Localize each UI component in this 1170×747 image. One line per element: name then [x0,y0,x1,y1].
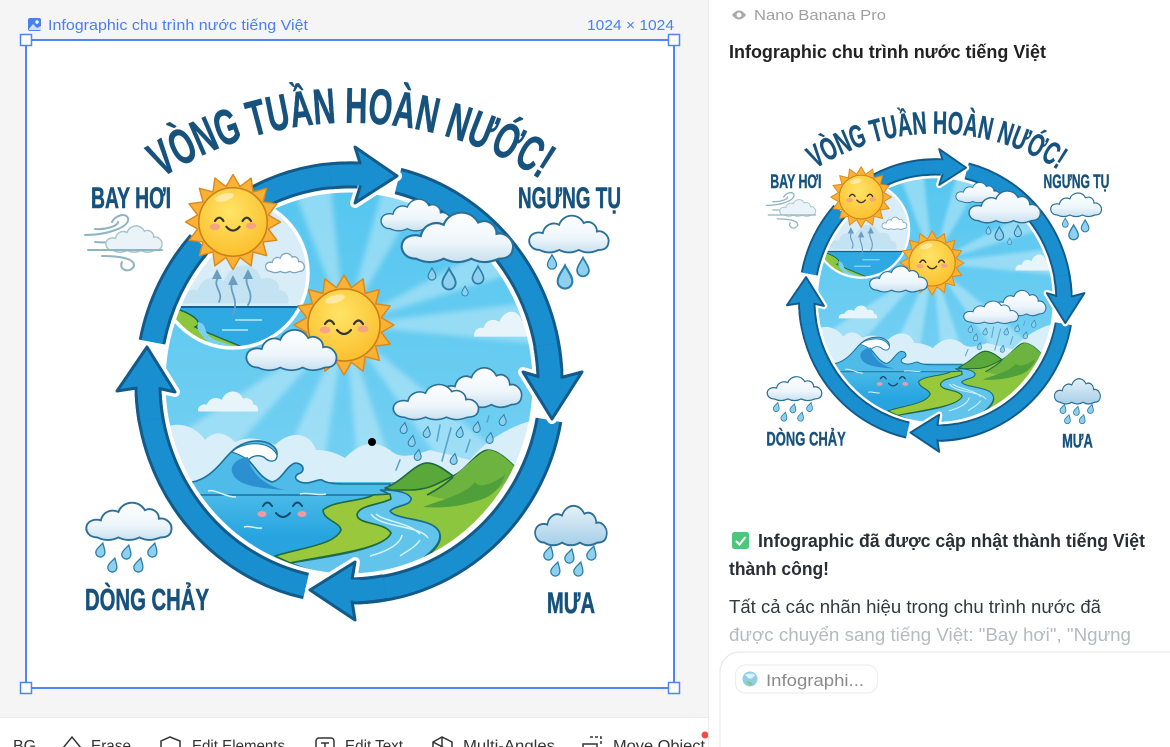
success message: Infographic đã được cập nhật thành tiếng Việt [758,531,1145,551]
model name: Nano Banana Pro [754,8,886,24]
attachment chip: Infographi... [766,671,864,690]
wave [192,441,390,528]
plain white clouds [198,312,538,412]
icon: condensation cloud [529,216,609,289]
main infographic text [85,82,621,620]
icon: evaporation sun [186,174,280,270]
thumbnail infographic [766,107,1109,453]
panel: bottom toolbar [0,717,709,747]
arrowheads [117,147,582,620]
thumbnail infographic: DÒNG CHẢY [766,426,846,450]
label: mưa: MƯA [547,587,595,620]
sea [160,482,540,592]
condensation clouds in scene [381,199,522,420]
attachment chip [736,665,878,693]
label: bay hơi: BAY HƠI [91,182,171,215]
river [290,490,440,585]
thumbnail infographic: VÒNG TUẦN HOÀN NƯỚC! [804,107,1068,169]
hills and land [385,450,535,562]
label: dòng chảy: DÒNG CHẢY [85,581,209,617]
white ring edge [163,190,535,576]
description text: Tất cả các nhãn hiệu trong chu trình nước đã [729,597,1102,617]
condensation drops [428,266,484,296]
description text: được chuyển sang tiếng Việt: "Bay hơi", "Ngưng [729,625,1131,645]
title: VÒNG TUẦN HOÀN NƯỚC! [144,82,556,178]
result title: Infographic chu trình nước tiếng Việt [729,42,1046,62]
thumbnail infographic: MƯA [1062,431,1093,452]
water cycle artwork [85,147,609,620]
sea face [258,502,306,517]
description text [729,597,1131,645]
input box [720,652,1170,747]
left river bank [275,494,391,563]
thumbnail infographic: NGƯNG TỤ [1044,172,1109,193]
icon: rain cloud [535,506,607,577]
rays sun [294,275,394,375]
horizon clouds [160,420,540,500]
icon: wind and cloud [85,215,162,270]
success message [729,531,1145,579]
cycle ring [148,175,550,591]
selected image frame [20,34,680,694]
image filename label: Infographic chu trình nước tiếng Việt [48,17,309,34]
evaporation arrows [216,276,251,315]
panel: chat sidebar [708,0,1170,747]
inset evaporation bubble [158,198,310,352]
cursor dot [368,438,376,446]
label: ngưng tụ: NGƯNG TỤ [518,182,621,215]
rain shower [396,416,489,470]
scene circle [150,180,550,592]
cloud near sun [246,330,336,370]
icon: green check [732,532,749,549]
icon: runoff cloud [86,503,172,573]
canvas background [0,0,709,718]
thumbnail infographic: BAY HƠI [770,172,821,193]
image size label: 1024 × 1024 [587,17,674,34]
success message: thành công! [729,559,829,579]
